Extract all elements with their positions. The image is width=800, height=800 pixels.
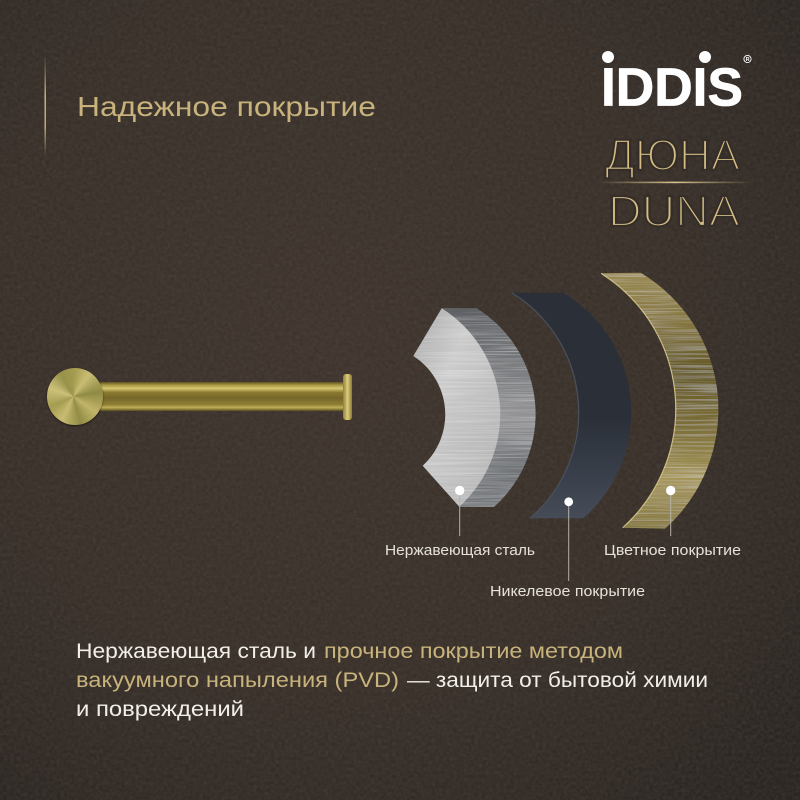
description text: и повреждений — [76, 697, 244, 721]
layer: nickel coating — [512, 293, 631, 518]
callout: nickel coating — [490, 497, 645, 600]
description text — [76, 639, 708, 721]
description text: прочное покрытие методом — [324, 639, 623, 663]
description text: вакуумного напыления (PVD) — [76, 668, 399, 692]
layer: colour coating — [601, 273, 718, 529]
callout: colour coating — [604, 486, 741, 559]
collection name: ДЮНА — [605, 131, 741, 180]
description text: Нержавеющая сталь и — [76, 639, 316, 663]
product: brass rod — [100, 374, 352, 420]
callout: stainless steel: Нержавеющая сталь — [385, 543, 535, 559]
callout: colour coating: Цветное покрытие — [604, 543, 741, 559]
logo: iddis: IDDIS — [601, 58, 743, 118]
description text: — защита от бытовой химии — [407, 668, 708, 692]
callout: nickel coating: Никелевое покрытие — [490, 584, 645, 600]
collection name — [596, 131, 754, 236]
layer: stainless steel — [413, 308, 536, 507]
logo: iddis: R — [746, 57, 750, 63]
heading: Надежное покрытие — [77, 91, 376, 122]
product: brass disc — [47, 368, 103, 425]
callout: stainless steel — [385, 486, 535, 559]
collection name: DUNA — [608, 187, 741, 236]
accent vertical line — [44, 55, 46, 157]
